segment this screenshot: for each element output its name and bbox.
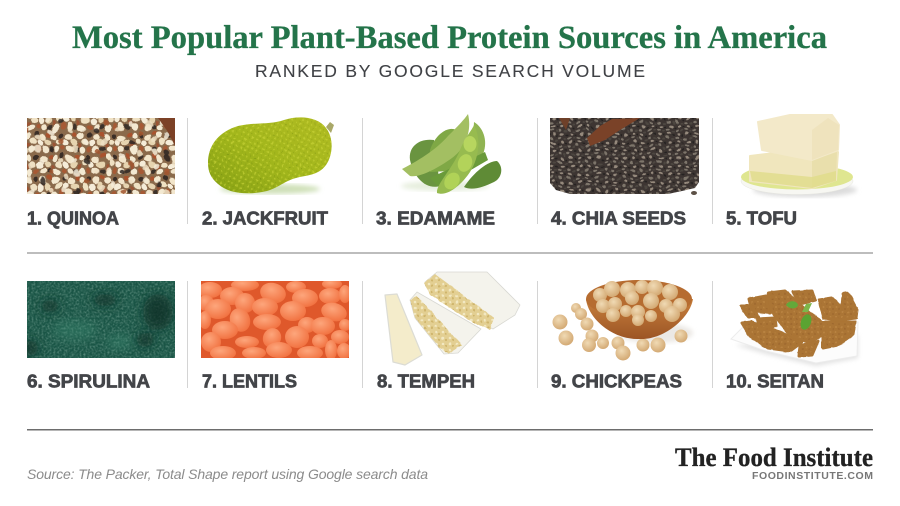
photo: lentils xyxy=(198,279,351,360)
panel: 8 tempeh xyxy=(377,272,520,392)
panel: 6 spirulina xyxy=(22,281,175,392)
panel: 9 chickpeas xyxy=(551,280,693,392)
photo: tofu xyxy=(741,115,857,197)
photo: seitan xyxy=(731,291,858,366)
panel: 7 lentils xyxy=(198,279,351,392)
label: 5. TOFU: 5. TOFU xyxy=(726,208,797,228)
subtitle: RANKED BY GOOGLE SEARCH VOLUME xyxy=(255,61,645,81)
panel: 2 jackfruit xyxy=(202,117,334,225)
panel: 5 tofu xyxy=(726,115,857,228)
photo: tempeh xyxy=(385,272,520,365)
label: 7. LENTILS: 7. LENTILS xyxy=(202,372,297,392)
label: 6. SPIRULINA: 6. SPIRULINA xyxy=(27,372,150,392)
logo: The Food Institute: The Food Institute xyxy=(675,443,873,472)
label: 8. TEMPEH: 8. TEMPEH xyxy=(377,372,475,392)
label: 4. CHIA SEEDS: 4. CHIA SEEDS xyxy=(551,208,686,228)
label: 10. SEITAN: 10. SEITAN xyxy=(726,372,824,392)
photo: chickpeas xyxy=(552,280,693,360)
label: 1. QUINOA: 1. QUINOA xyxy=(27,208,119,228)
source note: Source: The Packer, Total Shape report using Google search data xyxy=(27,466,428,482)
panel: 4 chia seeds xyxy=(550,118,699,225)
photo: chia seeds xyxy=(550,118,699,195)
photo: edamame xyxy=(401,114,501,194)
photo: jackfruit xyxy=(208,117,334,195)
panel: 1 quinoa xyxy=(27,118,175,229)
bottom rule xyxy=(27,429,873,430)
panel: 3 edamame xyxy=(376,114,501,228)
logo: The Food Institute: FOODINSTITUTE.COM xyxy=(752,470,873,482)
label: 3. EDAMAME: 3. EDAMAME xyxy=(376,208,495,228)
label: 9. CHICKPEAS: 9. CHICKPEAS xyxy=(551,372,682,392)
title: Most Popular Plant-Based Protein Sources in America xyxy=(72,20,827,56)
photo: spirulina xyxy=(22,281,175,358)
photo: quinoa xyxy=(27,118,175,194)
rule between rows xyxy=(27,252,873,254)
label: 2. JACKFRUIT: 2. JACKFRUIT xyxy=(202,208,328,228)
panel: 10 seitan xyxy=(726,291,858,392)
